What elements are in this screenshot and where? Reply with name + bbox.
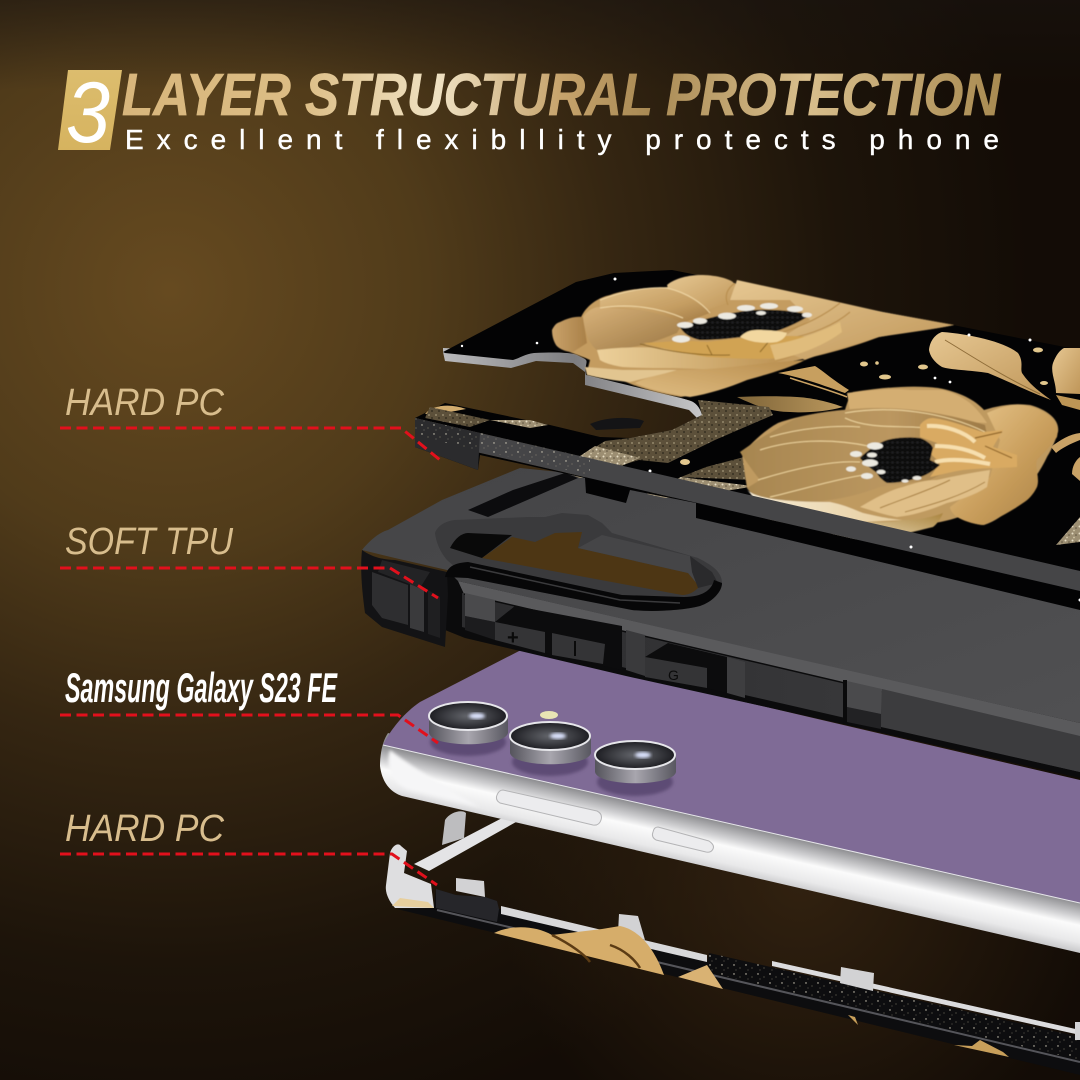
camera lenses bbox=[429, 702, 676, 796]
gold print bbox=[494, 926, 1009, 1057]
gold stems and leaves bbox=[737, 332, 1080, 481]
large right petal bbox=[950, 405, 1058, 525]
layer: top hard PC back shell bbox=[415, 270, 1080, 610]
bumper main surface bbox=[362, 468, 1080, 723]
label: Samsung Galaxy S23 FE: Samsung Galaxy S23 FE bbox=[65, 664, 338, 711]
front petal bbox=[832, 513, 943, 540]
purple back bbox=[383, 650, 1080, 903]
seed centre bbox=[680, 310, 810, 340]
crystals bbox=[672, 303, 812, 343]
clip tabs bbox=[456, 878, 1080, 1040]
mid left petal bbox=[583, 307, 683, 350]
layer: bottom hard PC shell bbox=[386, 811, 1080, 1075]
tab bbox=[578, 535, 712, 585]
far left lobe bbox=[552, 317, 587, 352]
lower front petal bbox=[635, 360, 805, 397]
side buttons bbox=[496, 790, 714, 852]
volume and power buttons bbox=[495, 606, 727, 693]
lens 2 bbox=[510, 722, 591, 764]
crystals bbox=[846, 442, 922, 483]
ruffled core bbox=[920, 418, 1017, 477]
aluminium frame bbox=[380, 733, 1080, 953]
printed strip bbox=[397, 889, 1080, 1075]
shell side band bbox=[415, 406, 1080, 610]
small front petal bbox=[585, 367, 677, 382]
label: Samsung Galaxy S23 FE bbox=[60, 664, 438, 743]
back top petal bbox=[847, 389, 987, 423]
label: hard PC top: HARD PC bbox=[65, 382, 225, 424]
flower 1 bbox=[552, 275, 954, 397]
flower 2 bbox=[740, 387, 1058, 540]
upper petal bbox=[600, 288, 710, 323]
reinforced corner bbox=[361, 550, 448, 647]
subheading: Excellent flexibllity protects phone bbox=[125, 124, 999, 155]
glitter ribbons bbox=[559, 400, 1080, 545]
layer: soft TPU bumper bbox=[361, 418, 1080, 778]
main left petals bbox=[740, 408, 990, 503]
number badge: 3 bbox=[66, 65, 110, 161]
white arm and corner bbox=[386, 811, 516, 908]
label: hard PC top bbox=[60, 382, 440, 460]
layer: Samsung Galaxy S23 FE phone bbox=[380, 650, 1080, 953]
label: hard PC bottom bbox=[60, 808, 437, 885]
inner ruffled petals bbox=[643, 336, 827, 359]
label: soft TPU bbox=[60, 521, 438, 598]
lower lip bbox=[445, 562, 722, 611]
flash bbox=[540, 711, 558, 719]
back top petal bbox=[667, 275, 735, 310]
back right petal bbox=[730, 280, 954, 360]
lower big petal bbox=[597, 347, 800, 370]
white rim bbox=[501, 906, 707, 962]
label: hard PC bottom: HARD PC bbox=[65, 808, 225, 850]
seed centre bbox=[860, 437, 940, 483]
lower right petals bbox=[860, 470, 990, 517]
camera cutout bbox=[435, 513, 722, 611]
lens 3 bbox=[595, 741, 676, 783]
gap block bbox=[843, 680, 1080, 772]
cream lower petals bbox=[747, 490, 903, 523]
gold speckles bbox=[461, 278, 1048, 485]
bumper side wall bbox=[445, 575, 1080, 778]
title block bbox=[58, 62, 1001, 161]
flower silhouette bbox=[553, 277, 954, 397]
cutout opening bbox=[482, 532, 699, 595]
volume and power buttons: G bbox=[668, 667, 679, 683]
silver shell edge bbox=[443, 348, 706, 423]
label: soft TPU: SOFT TPU bbox=[65, 521, 233, 563]
flower silhouette bbox=[742, 387, 1058, 540]
lens 1 bbox=[429, 702, 508, 744]
volume and power buttons: + bbox=[507, 627, 519, 649]
black printed surface bbox=[415, 270, 1080, 572]
